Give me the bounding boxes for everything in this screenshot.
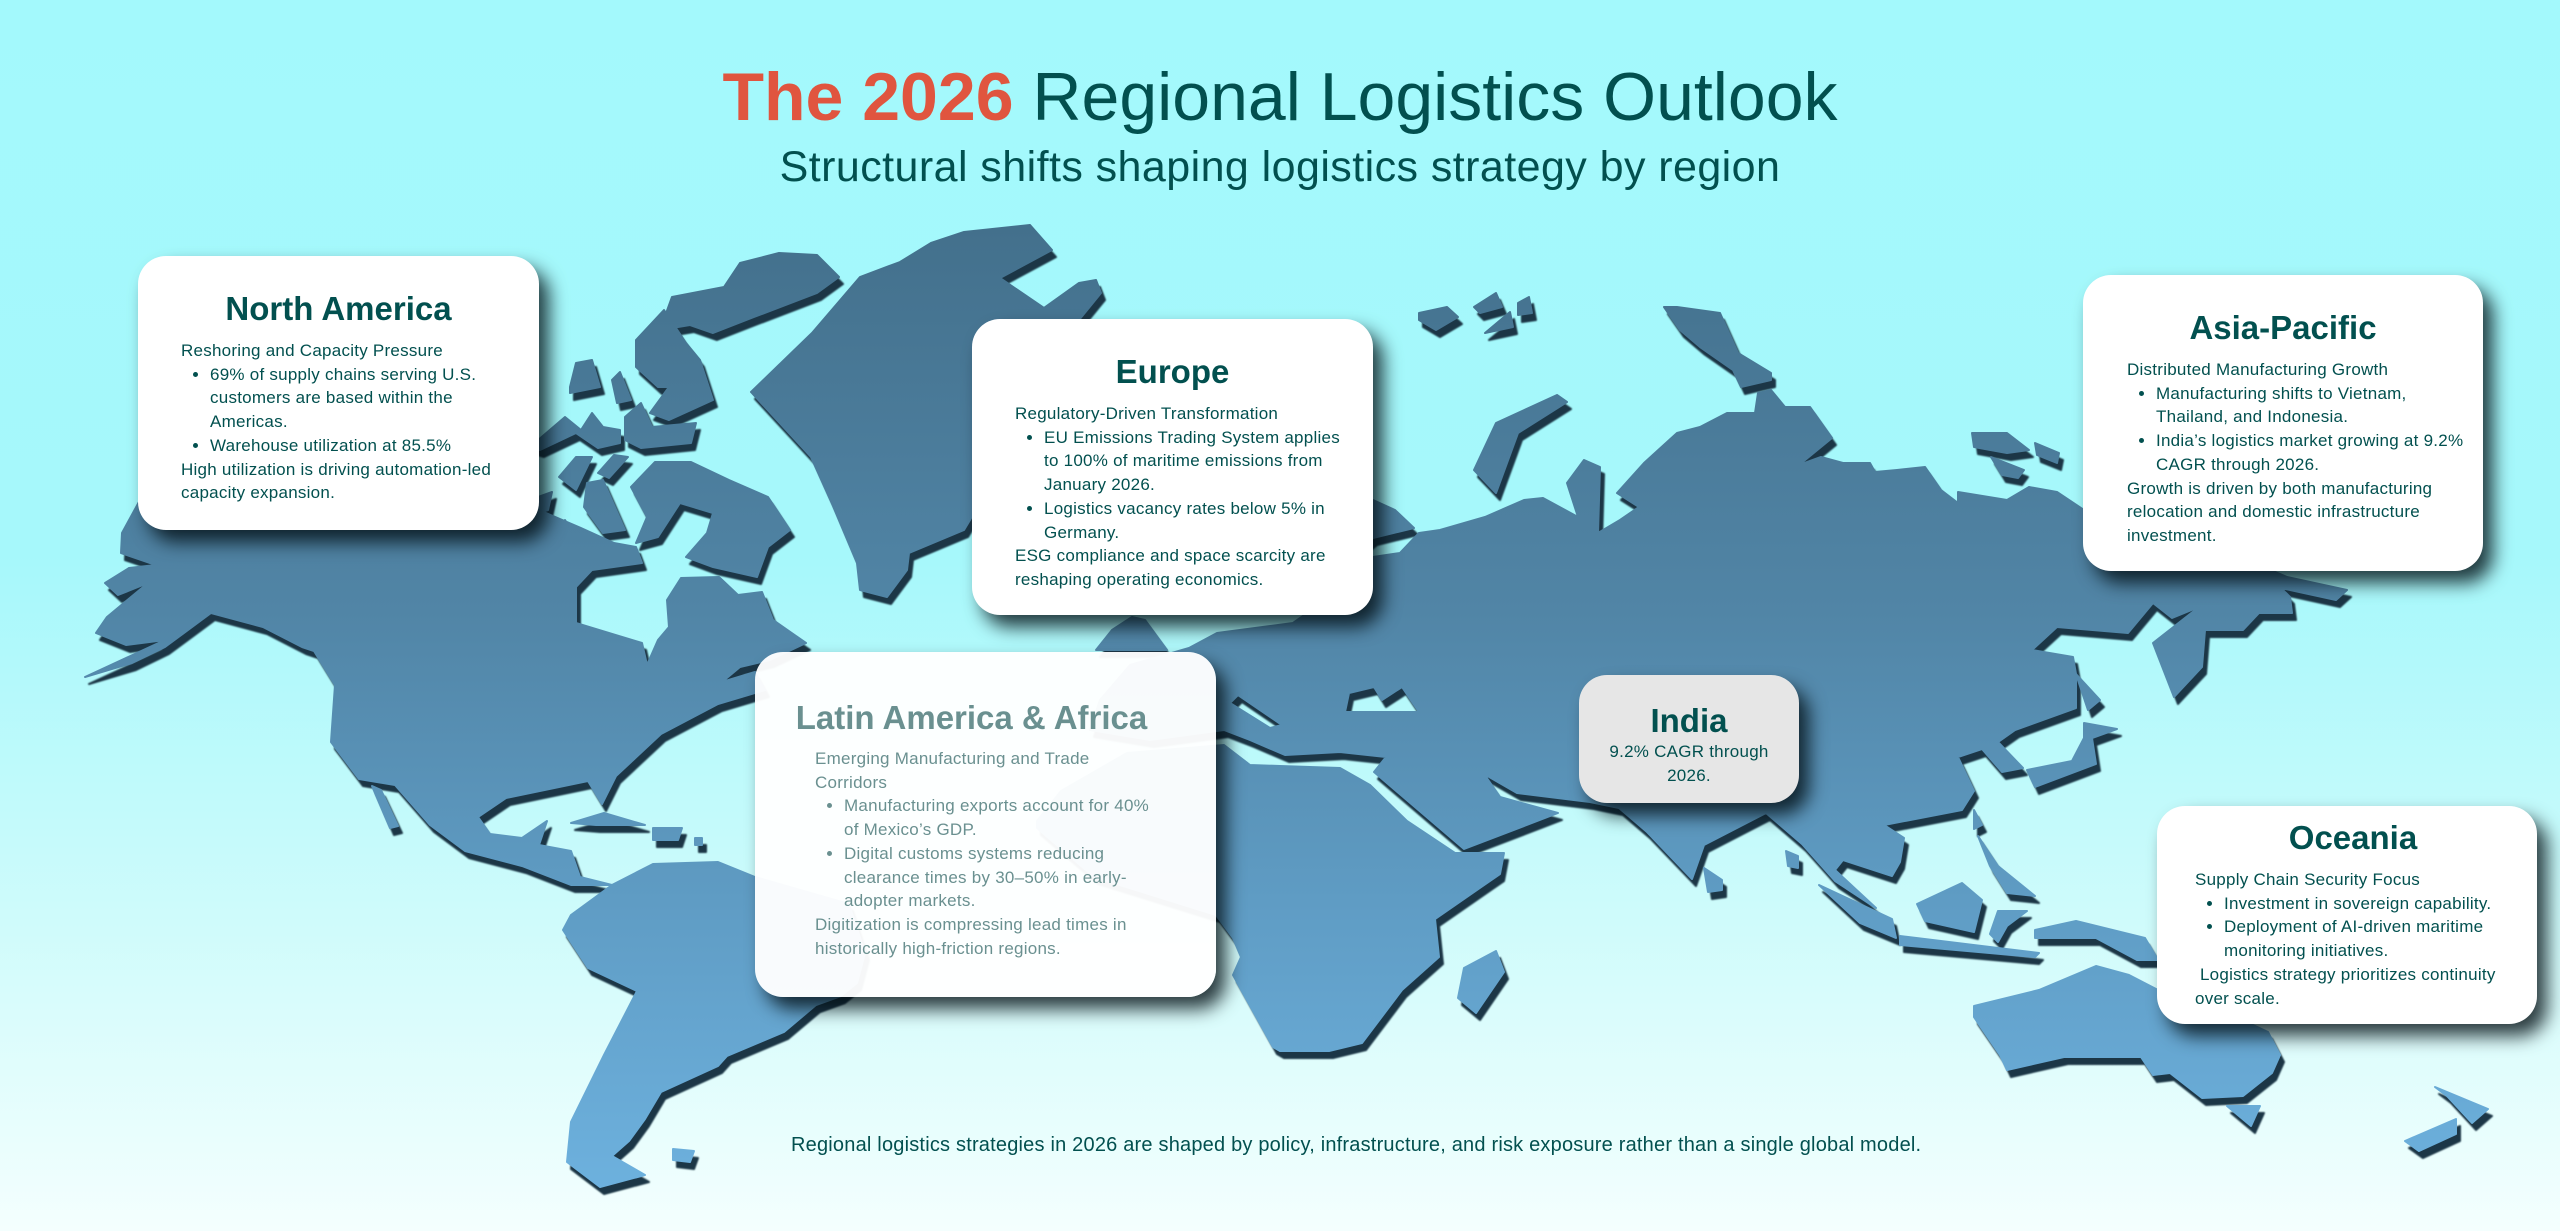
text: Oceania body: Deployment of AI-driven maritime xyxy=(2224,917,2483,936)
text: Asia-Pacific body xyxy=(2127,360,2463,545)
Australia xyxy=(1974,966,2280,1098)
Japan and Sakhalin xyxy=(2027,674,2117,787)
text: Europe body: EU Emissions Trading System applies xyxy=(1044,428,1340,447)
text: Europe body: Germany. xyxy=(1044,523,1119,542)
panel: Asia-Pacific xyxy=(2083,275,2483,571)
Eurasia xyxy=(1090,390,2347,908)
panel: Oceania xyxy=(2157,806,2537,1024)
text: Europe body: reshaping operating economics. xyxy=(1015,570,1263,589)
text: Asia-Pacific body: relocation and domestic infrastructure xyxy=(2127,502,2420,521)
text: Asia-Pacific body: India’s logistics market growing at 9.2% xyxy=(2156,431,2463,450)
heading: India: India xyxy=(1650,702,1728,739)
Caribbean xyxy=(571,813,702,845)
text: Latin America and Africa body: adopter markets. xyxy=(844,891,976,910)
Baja California xyxy=(372,786,398,828)
text: Latin America and Africa body: Emerging Manufacturing and Trade xyxy=(815,749,1090,768)
panel: Europe xyxy=(972,319,1373,615)
text: North America body: customers are based within the xyxy=(210,388,453,407)
North America xyxy=(85,500,806,885)
text: Europe body: January 2026. xyxy=(1044,475,1155,494)
text: North America body: Warehouse utilization at 85.5% xyxy=(210,436,451,455)
text: Europe body: Logistics vacancy rates below 5% in xyxy=(1044,499,1325,518)
panel: Latin America and Africa xyxy=(755,652,1216,997)
Svalbard xyxy=(1419,293,1532,333)
Arctic Canada islands xyxy=(530,253,839,577)
Scandinavia xyxy=(1300,500,1414,600)
text: Latin America and Africa body: Manufacturing exports account for 40% xyxy=(844,796,1149,815)
text: Asia-Pacific body: CAGR through 2026. xyxy=(2156,455,2319,474)
text: Latin America and Africa body: Corridors Digitization is compressing lead times in xyxy=(815,773,1127,934)
Madagascar xyxy=(1458,951,1504,1013)
Africa xyxy=(1037,745,1504,1051)
text: India body: 9.2% CAGR through xyxy=(1609,742,1769,761)
text: Europe body: to 100% of maritime emissions from xyxy=(1044,451,1323,470)
text: North America body: capacity expansion. xyxy=(181,483,335,502)
heading: Europe: Europe xyxy=(1116,353,1229,390)
text: India body: 2026. xyxy=(1667,766,1711,785)
Greenland xyxy=(751,225,1101,597)
Novaya Zemlya xyxy=(1474,395,1567,493)
heading: North America: North America xyxy=(225,290,452,327)
subtitle: Structural shifts shaping logistics strategy by region xyxy=(780,143,1780,191)
text: Latin America and Africa body: of Mexico’s GDP. xyxy=(844,820,977,839)
text: North America body: Americas. xyxy=(210,412,288,431)
Southeast Asia islands xyxy=(1704,810,2158,960)
text: North America body: Reshoring and Capacity Pressure High utilization is driving automation-led xyxy=(181,341,491,479)
text: Latin America and Africa body: Digital customs systems reducing xyxy=(844,844,1104,863)
text: Europe body: Regulatory-Driven Transformation ESG compliance and space scarcity are xyxy=(1015,404,1326,565)
Tasmania xyxy=(2227,1106,2260,1126)
heading: Latin America and Africa: Latin America & Africa xyxy=(796,699,1147,736)
Falkland Islands xyxy=(673,1149,694,1162)
heading: Oceania: Oceania xyxy=(2289,819,2417,856)
text: Oceania body: over scale. xyxy=(2195,989,2280,1008)
text: Asia-Pacific body: Manufacturing shifts to Vietnam, xyxy=(2156,384,2407,403)
text: Latin America and Africa body: clearance times by 30–50% in early- xyxy=(844,868,1127,887)
text: Oceania body: monitoring initiatives. xyxy=(2224,941,2388,960)
panel: North America xyxy=(138,256,539,530)
text: India body xyxy=(1609,742,1769,785)
Siberian islands xyxy=(1664,307,2059,478)
South America xyxy=(563,862,865,1187)
heading: Asia-Pacific: Asia-Pacific xyxy=(2189,309,2377,346)
British Isles xyxy=(1096,617,1167,650)
text: North America body: 69% of supply chains serving U.S. xyxy=(210,365,476,384)
text: Latin America and Africa body: historically high-friction regions. xyxy=(815,939,1061,958)
panel: India xyxy=(1579,675,1799,803)
text: Asia-Pacific body: Thailand, and Indonesia. xyxy=(2156,407,2348,426)
text: Oceania body: Supply Chain Security Focus Logistics strategy prioritizes continuity xyxy=(2195,870,2496,984)
text: Asia-Pacific body: Distributed Manufacturing Growth Growth is driven by both manufacturing xyxy=(2127,360,2432,498)
text: Oceania body: Investment in sovereign capability. xyxy=(2224,894,2491,913)
footer note: Regional logistics strategies in 2026 are shaped by policy, infrastructure, and risk exposure rather than a single global model. xyxy=(791,1134,1921,1156)
text: Asia-Pacific body: investment. xyxy=(2127,526,2217,545)
New Zealand xyxy=(2405,1087,2488,1151)
title: The 2026 Regional Logistics Outlook xyxy=(722,59,1838,135)
